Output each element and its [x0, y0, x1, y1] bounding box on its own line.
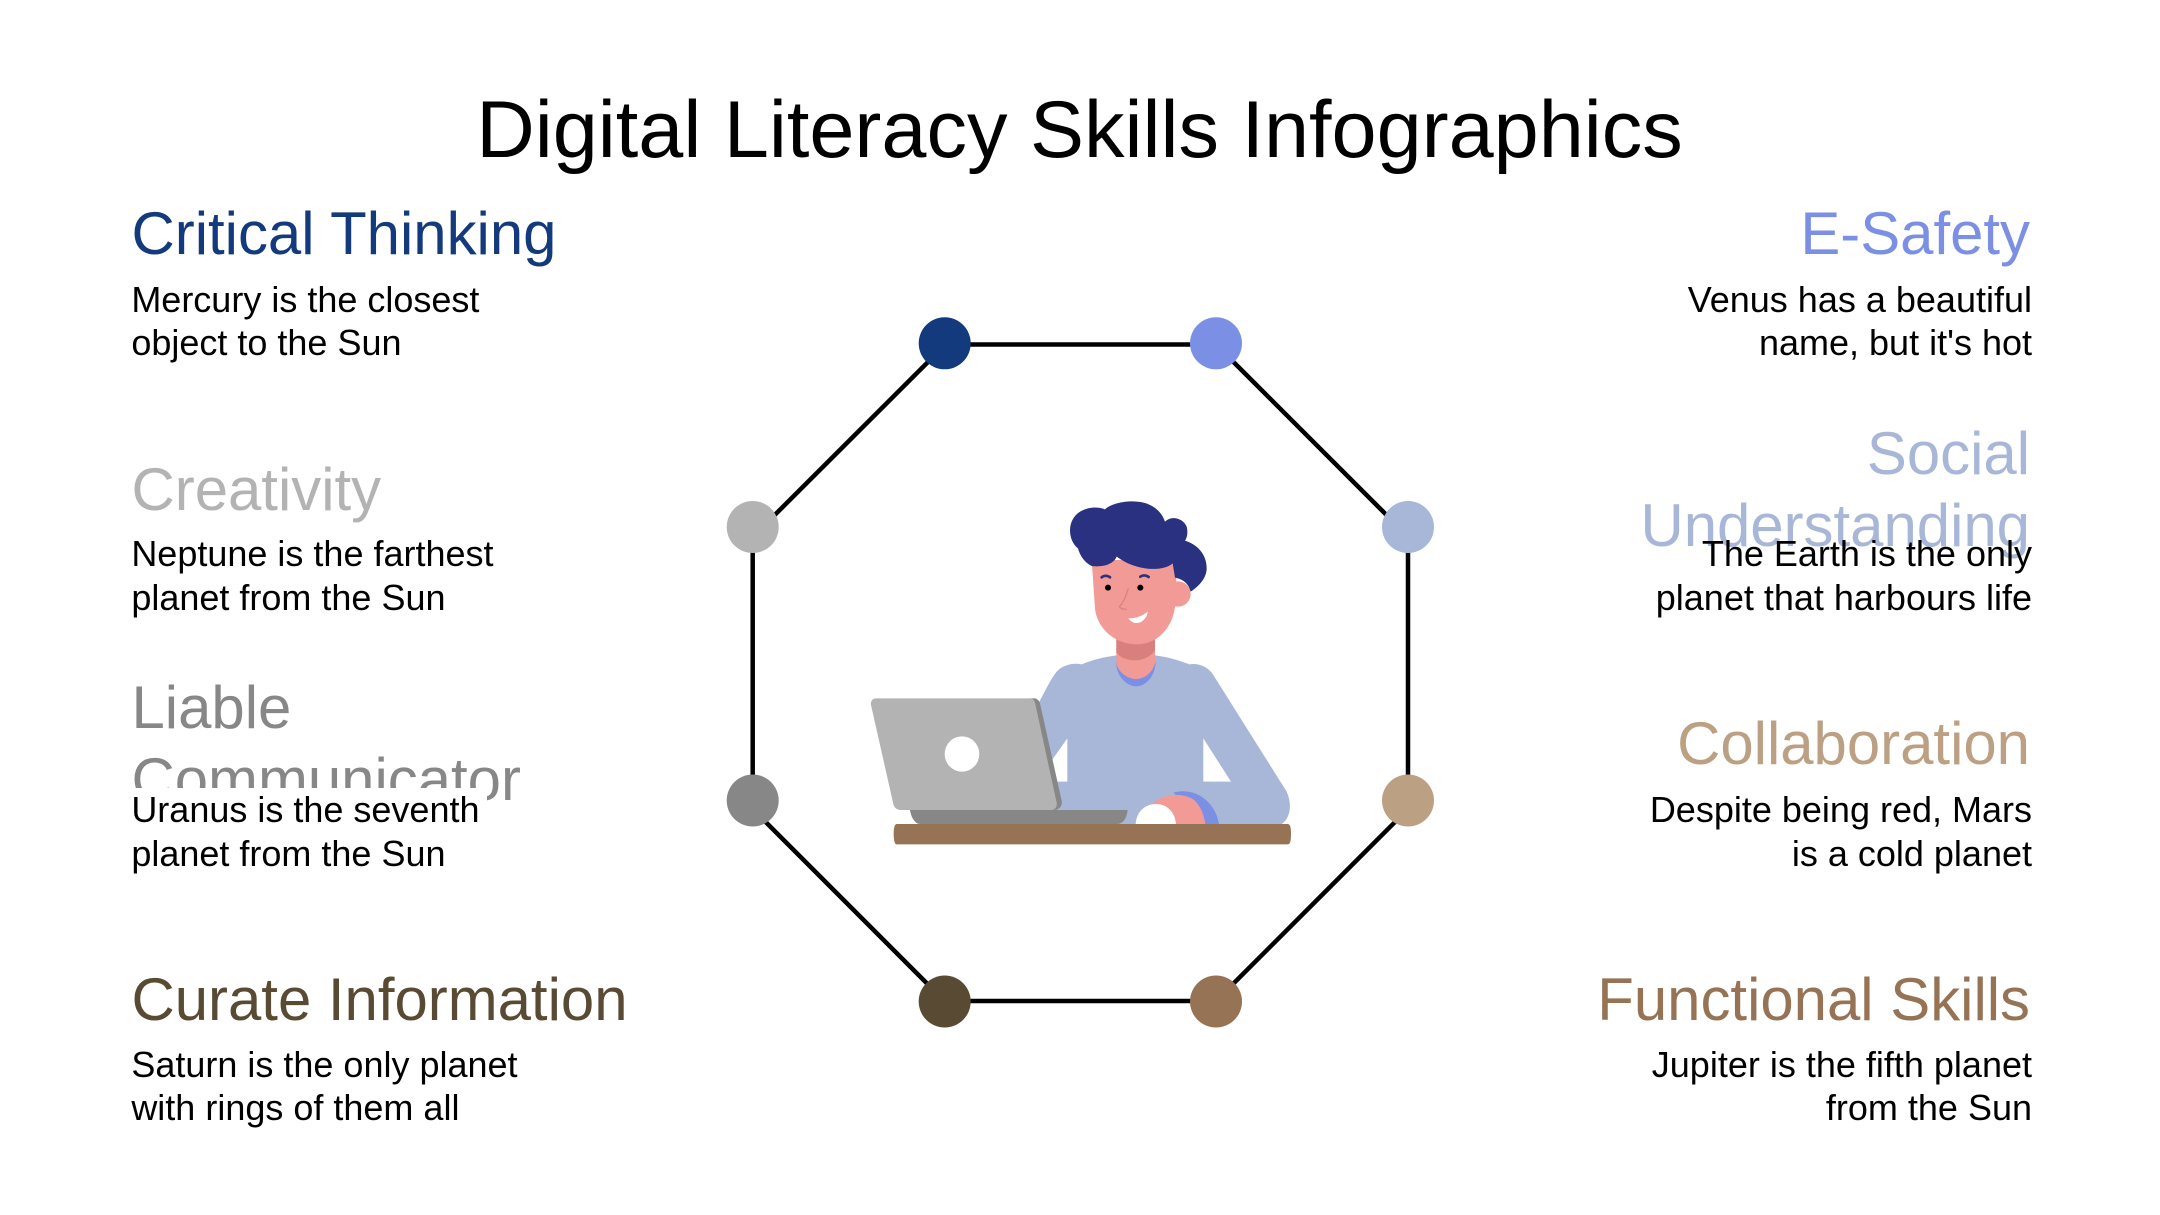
- text: saturn: [131, 1044, 518, 1128]
- hand: [1152, 795, 1205, 824]
- panel: social understanding: [1640, 420, 2032, 618]
- ear: [1165, 581, 1191, 607]
- text: jupiter: from the Sun: [1826, 1087, 2032, 1128]
- node: critical thinking: [919, 317, 971, 369]
- text: neptune: [131, 533, 494, 618]
- text: mars: [1650, 789, 2032, 874]
- text: earth: [1656, 533, 2032, 618]
- laptop base: [910, 810, 1128, 824]
- node: curate information: [919, 976, 971, 1028]
- cuff: [1173, 791, 1219, 824]
- text: saturn: with rings of them all: [131, 1087, 459, 1128]
- text: jupiter: [1652, 1044, 2032, 1128]
- text: neptune: planet from the Sun: [131, 577, 446, 618]
- text: mercury: [131, 279, 480, 363]
- hair: [1070, 501, 1207, 592]
- eyebrows: [1102, 575, 1149, 577]
- text: venus: [1688, 279, 2032, 363]
- head: [1092, 560, 1177, 644]
- nose: [1119, 588, 1128, 609]
- text: neptune: Neptune is the farthest: [131, 533, 494, 574]
- heading: functional skills: Functional Skills: [1597, 966, 2030, 1033]
- text: jupiter: Jupiter is the fifth planet: [1652, 1044, 2032, 1085]
- arm gaps: [1037, 738, 1231, 782]
- heading: liable communicator: Liable Communicator: [132, 674, 521, 813]
- heading: creativity: Creativity: [132, 456, 381, 523]
- title: Digital Literacy Skills Infographics: [476, 85, 1683, 175]
- heading: social understanding: Social Understanding: [1640, 420, 2030, 559]
- heading: critical thinking: Critical Thinking: [132, 200, 556, 267]
- eyes: [1105, 585, 1143, 591]
- text: venus: Venus has a beautiful: [1688, 279, 2032, 320]
- text: uranus: [131, 788, 487, 887]
- heading: collaboration: Collaboration: [1677, 710, 2030, 777]
- panel: e-safety: [1688, 200, 2032, 363]
- text: earth: The Earth is the only: [1702, 533, 2032, 574]
- panel: functional skills: [1597, 966, 2032, 1128]
- text: mercury: object to the Sun: [131, 322, 402, 363]
- panel: curate information: [131, 966, 628, 1128]
- node: creativity: [727, 501, 779, 553]
- laptop logo: [945, 736, 979, 772]
- text: mars: Despite being red, Mars: [1650, 789, 2032, 830]
- panel: critical thinking: [131, 200, 556, 363]
- text: uranus: Uranus is the seventh: [131, 789, 480, 830]
- laptop hinge edge: [1030, 698, 1062, 810]
- desk: [894, 824, 1291, 844]
- panel: creativity: [131, 456, 494, 618]
- text: saturn: Saturn is the only planet: [131, 1044, 518, 1085]
- node: liable communicator: [727, 774, 779, 826]
- smile: [1128, 612, 1148, 623]
- illustration: person at laptop: [871, 501, 1291, 844]
- node: functional skills: [1190, 976, 1242, 1028]
- mouse: [1136, 804, 1176, 824]
- panel: collaboration: [1650, 710, 2032, 874]
- collar: [1116, 663, 1156, 686]
- laptop lid: [871, 698, 1057, 810]
- text: earth: planet that harbours life: [1656, 577, 2032, 618]
- text: mercury: Mercury is the closest: [131, 279, 479, 320]
- text: venus: name, but it's hot: [1759, 322, 2032, 363]
- text: uranus: planet from the Sun: [131, 833, 446, 874]
- node: collaboration: [1382, 774, 1434, 826]
- neck shadow: [1116, 637, 1155, 660]
- heading: curate information: Curate Information: [132, 966, 628, 1033]
- node: e-safety: [1190, 317, 1242, 369]
- heading: e-safety: E-Safety: [1800, 200, 2030, 267]
- text: mars: is a cold planet: [1792, 833, 2032, 874]
- octagon outline: [753, 344, 1408, 1001]
- neck: [1116, 637, 1155, 679]
- node: social understanding: [1382, 501, 1434, 553]
- panel: liable communicator: [131, 674, 521, 874]
- sweater: [1038, 655, 1290, 824]
